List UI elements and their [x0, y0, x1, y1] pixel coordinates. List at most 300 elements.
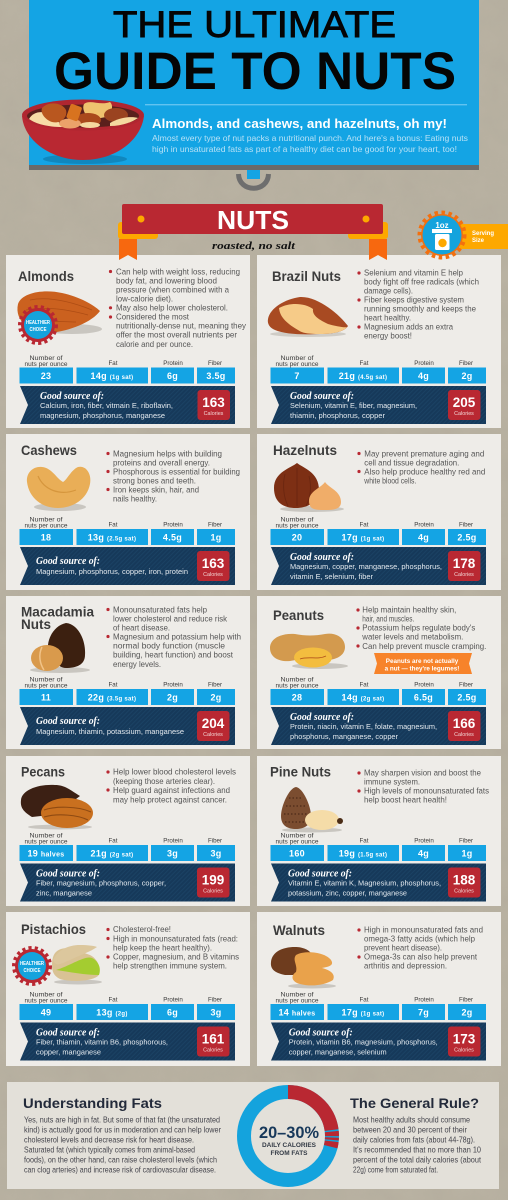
good source banner — [20, 864, 235, 902]
stats row: nuts per ounce — [24, 682, 68, 690]
good source banner: Protein, niacin, vitamin E, folate, magnesium, — [290, 722, 437, 731]
benefits list: of heart disease. — [113, 622, 170, 632]
stats row: nuts per ounce — [24, 522, 68, 530]
card: Peanuts — [257, 596, 501, 749]
benefits list: (keeping those arteries clear). — [113, 776, 215, 786]
stats row: nuts per ounce — [24, 361, 68, 368]
good source banner: Protein, vitamin B6, magnesium, phosphorus, — [289, 1038, 438, 1046]
good source banner: zinc, manganese — [36, 888, 92, 898]
good source banner: potassium, zinc, copper, manganese — [288, 888, 407, 898]
stats row — [20, 992, 235, 1020]
benefits list: offer the most overall nutrients per — [116, 330, 237, 340]
benefits list: Help maintain healthy skin, — [362, 605, 456, 615]
benefits list: immune system. — [364, 777, 420, 787]
benefits list: nails healthy. — [113, 493, 157, 503]
benefits list: body fat, and lowering blood — [116, 275, 217, 285]
stats row: Number of — [30, 832, 63, 840]
benefits list: heart healthy. — [364, 313, 411, 323]
stats row: Protein — [163, 996, 183, 1004]
icon: pecans — [21, 785, 93, 830]
heading: Cashews: Cashews — [21, 442, 77, 458]
benefits list — [357, 268, 479, 341]
heading: Pecans: Pecans — [21, 764, 65, 780]
stats row: Number of — [280, 832, 314, 840]
stats row: Protein — [163, 682, 183, 688]
stats row: Fiber — [459, 838, 473, 844]
stats row: 2g — [461, 371, 473, 381]
stats row: 6g — [167, 1008, 178, 1018]
benefits list: cell and tissue degradation. — [364, 457, 459, 467]
stats row: 22g (3.5g sat) — [88, 692, 136, 702]
good source banner: Calories — [203, 1048, 223, 1054]
text: general rule: Most healthy adults should consume — [353, 1115, 470, 1125]
good source banner: Good source of: — [288, 868, 352, 880]
intro text: Almost every type of nut packs a nutritional punch. And here's a bonus: Eating nuts — [152, 133, 468, 143]
stats row: Number of — [280, 516, 314, 524]
stats row — [20, 832, 235, 861]
title — [54, 4, 456, 101]
good source banner: Calories — [203, 732, 223, 738]
stats row: nuts per ounce — [276, 361, 319, 368]
card: Brazil Nuts — [257, 255, 501, 428]
good source banner: magnesium, phosphorus, manganese — [40, 411, 165, 420]
text: understanding fats: kind) is actually good for us in moderation and can help lower — [24, 1124, 221, 1134]
ribbon: NUTS heading — [118, 204, 388, 260]
benefits list: proteins and overall energy. — [113, 457, 210, 467]
good source banner — [271, 547, 486, 585]
benefits list: Help guard against infections and — [113, 785, 230, 795]
stats row — [270, 355, 486, 384]
icon: almond — [17, 291, 102, 334]
benefits list: May also help lower cholesterol. — [116, 302, 228, 312]
benefits list: nutritionally-dense nut, meaning they — [116, 321, 247, 331]
benefits list: help keep the heart healthy). — [113, 942, 212, 952]
good source banner: Magnesium, phosphorus, copper, iron, protein — [36, 567, 188, 576]
benefits list — [106, 924, 240, 971]
card: Pistachios — [6, 912, 250, 1066]
stats row: 3g — [167, 848, 178, 858]
stats row: 1g — [461, 848, 473, 858]
stats row: 3g — [210, 848, 222, 858]
stats row: Fat — [109, 996, 118, 1004]
stats row: 17g (1g sat) — [342, 1008, 384, 1018]
badge: 1oz serving size: Serving — [472, 231, 494, 237]
good source banner — [20, 707, 235, 745]
benefits list: lower cholesterol and reduce risk — [113, 613, 228, 623]
badge: 1oz serving size — [420, 212, 508, 258]
stats row — [270, 516, 486, 545]
stats row: 2.5g — [457, 532, 477, 542]
benefits list: omega-3 fatty acids (which help — [364, 934, 475, 944]
good source banner: Good source of: — [290, 551, 354, 563]
good source banner: 163 — [202, 395, 225, 410]
text: general rule: percent of the total daily calories (about — [353, 1154, 481, 1164]
heading: The General Rule?: The General Rule? — [350, 1095, 479, 1111]
stats row: Protein — [163, 360, 183, 367]
heading: Brazil Nuts: Brazil Nuts — [272, 268, 341, 284]
stats row: 19g (1.5g sat) — [339, 848, 387, 858]
callout: peanuts are legumes: a nut — they're legumes! — [385, 665, 459, 672]
good source banner: copper, manganese, selenium — [289, 1048, 387, 1056]
good source banner: copper, manganese — [36, 1048, 101, 1056]
good source banner: Good source of: — [36, 1026, 100, 1038]
stats row: Fat — [109, 522, 118, 528]
benefits list: strong bones and teeth. — [113, 475, 196, 485]
title: GUIDE TO NUTS — [54, 42, 456, 101]
heading: Macadamia Nuts: Macadamia — [21, 604, 94, 620]
good source banner: Fiber, thiamin, vitamin B6, phosphorous, — [36, 1038, 168, 1046]
text: general rule: between 20 and 30 percent of their — [353, 1124, 467, 1134]
benefits list: energy levels. — [113, 659, 161, 669]
stats row: Number of — [280, 676, 314, 684]
text: understanding fats: can clog arteries) and increase risk of cardiovascular disease. — [24, 1164, 216, 1174]
good source banner: phosphorus, manganese, copper — [290, 732, 398, 741]
panel: understanding fats and general rule — [7, 1082, 499, 1189]
stats row: nuts per ounce — [276, 522, 319, 530]
stats row: 2.5g — [457, 692, 477, 702]
stats row: Protein — [163, 838, 183, 844]
good source banner: Vitamin E, vitamin K, Magnesium, phosphorus, — [288, 878, 441, 888]
donut chart: daily calories from fats: DAILY CALORIES — [262, 1142, 317, 1149]
benefits list — [106, 767, 237, 804]
heading: Macadamia Nuts — [21, 604, 94, 632]
stats row: Number of — [30, 992, 63, 998]
heading: Pistachios: Pistachios — [21, 921, 86, 937]
benefits list: may help protect against cancer. — [113, 794, 227, 804]
benefits list: Magnesium adds an extra — [364, 322, 453, 332]
stats row: Fiber — [208, 522, 222, 528]
benefits list: prevent heart disease). — [364, 943, 442, 953]
good source banner: Good source of: — [40, 390, 104, 402]
good source banner: 161 — [202, 1032, 225, 1046]
text: general rule: It's recommended that no more than 10 — [353, 1144, 481, 1154]
good source banner: 205 — [453, 395, 476, 410]
benefits list: Iron keeps skin, hair, and — [113, 484, 199, 494]
stats row: 14g (2g sat) — [342, 692, 384, 702]
good source banner: Good source of: — [36, 555, 100, 567]
good source banner — [20, 386, 235, 424]
good source banner — [271, 1022, 486, 1060]
stats row: 23 — [41, 371, 51, 381]
stats row: Fat — [360, 838, 369, 844]
stats row: Fat — [360, 360, 369, 367]
stats row: 14 halves — [278, 1008, 316, 1018]
stats row: Fiber — [459, 682, 473, 688]
heading: Peanuts: Peanuts — [273, 607, 324, 623]
heading: Understanding Fats: Understanding Fats — [23, 1095, 162, 1111]
benefits list: damage cells). — [364, 286, 413, 296]
heading: Hazelnuts: Hazelnuts — [273, 442, 337, 458]
text: general rule: 22g) come from saturated fat. — [353, 1164, 438, 1174]
intro text — [152, 133, 468, 154]
heading: Walnuts: Walnuts — [273, 922, 325, 938]
heading: Almonds: Almonds — [18, 268, 74, 284]
stats row: Number of — [30, 676, 63, 684]
benefits list — [357, 924, 483, 971]
good source banner: Calories — [454, 572, 474, 578]
benefits list — [106, 604, 241, 669]
benefits list: white blood cells. — [364, 475, 416, 485]
good source banner: 173 — [453, 1032, 476, 1046]
intro text: high in unsaturated fats as part of a healthy diet can be good for your heart, too! — [152, 144, 457, 154]
stats row: Protein — [414, 838, 434, 844]
stats row: Protein — [414, 996, 434, 1004]
stats row: 21g (2g sat) — [91, 848, 133, 858]
badge: healthier choice — [14, 948, 50, 984]
card: Almonds — [6, 255, 250, 428]
stats row: Protein — [414, 682, 434, 688]
good source banner: Calories — [454, 888, 474, 894]
stats row: 6g — [167, 371, 178, 381]
donut chart: daily calories from fats: 20–30% — [259, 1123, 319, 1142]
good source banner: Good source of: — [290, 711, 354, 723]
donut chart: daily calories from fats: FROM FATS — [270, 1150, 308, 1157]
text: understanding fats: foods), on the other hand, can raise cholesterol levels (which — [24, 1154, 217, 1164]
stats row: Fiber — [208, 996, 222, 1004]
good source banner: 178 — [453, 556, 476, 571]
stats row: Number of — [280, 355, 314, 362]
icon: hanging handle — [238, 170, 268, 188]
benefits list: help strengthen immune system. — [113, 961, 227, 971]
text: general rule — [353, 1115, 481, 1174]
icon: bowl of nuts — [22, 100, 144, 164]
benefits list: Can help prevent muscle cramping. — [362, 641, 486, 651]
good source banner — [20, 1022, 235, 1060]
badge: healthier choice: CHOICE — [24, 968, 41, 974]
stats row — [20, 516, 235, 545]
icon: walnuts — [271, 947, 336, 988]
benefits list: Potassium helps regulate body's — [362, 623, 476, 633]
ribbon: NUTS heading: roasted, no salt — [212, 240, 296, 252]
good source banner: Calories — [454, 732, 474, 738]
good source banner — [271, 707, 486, 745]
text: understanding fats — [24, 1115, 221, 1174]
benefits list: low-calorie diet). — [116, 293, 173, 303]
benefits list: Can help with weight loss, reducing — [116, 266, 240, 276]
stats row: nuts per ounce — [24, 838, 68, 846]
good source banner: Good source of: — [289, 1026, 353, 1038]
stats row: 28 — [292, 692, 302, 702]
subtitle: Almonds, and cashews, and hazelnuts, oh my! — [152, 116, 447, 131]
heading: Pine Nuts: Pine Nuts — [270, 764, 331, 780]
badge: healthier choice: HEALTHIER — [26, 320, 50, 326]
good source banner: Good source of: — [36, 868, 100, 880]
benefits list: Fiber keeps digestive system — [364, 295, 464, 305]
good source banner: Magnesium, thiamin, potassium, manganese — [36, 727, 184, 736]
benefits list: High in monounsaturated fats (read: — [113, 933, 238, 943]
ribbon: NUTS heading: NUTS — [217, 205, 289, 235]
benefits list: arthritis and depression. — [364, 961, 447, 971]
stats row: 2g — [461, 1008, 473, 1018]
stats row: 18 — [41, 532, 51, 542]
good source banner: 188 — [453, 872, 476, 888]
stats row: 3g — [210, 1008, 222, 1018]
card: Macadamia Nuts — [6, 596, 250, 749]
benefits list: pressure (when combined with a — [116, 284, 229, 294]
stats row: Fat — [360, 682, 369, 688]
benefits list: help boost heart health! — [364, 795, 447, 805]
header panel — [29, 0, 479, 170]
stats row: Number of — [30, 355, 63, 362]
text: understanding fats: Saturated fat (which typically comes from animal-based — [24, 1144, 195, 1154]
good source banner: Calcium, iron, fiber, vitmain E, riboflavin, — [40, 401, 173, 410]
benefits list: High levels of monounsaturated fats — [364, 786, 490, 796]
stats row: Fat — [109, 682, 118, 688]
stats row: Fat — [109, 360, 118, 367]
card: Pecans — [6, 756, 250, 906]
stats row — [20, 355, 235, 384]
stats row: Number of — [280, 992, 314, 998]
stats row: Fiber — [208, 682, 222, 688]
benefits list: hair, and muscles. — [362, 614, 414, 624]
stats row: Fiber — [459, 522, 473, 528]
good source banner: Calories — [454, 411, 474, 417]
benefits list: running smoothly and keeps the — [364, 304, 476, 314]
benefits list: Considered the most — [116, 312, 190, 322]
donut chart: daily calories from fats — [244, 1092, 332, 1180]
stats row: 160 — [289, 848, 305, 858]
card: Cashews — [6, 434, 250, 590]
stats row: 4g — [418, 848, 429, 858]
text: general rule: daily calories from fats (about 44-78g). — [353, 1134, 475, 1144]
stats row — [20, 676, 235, 705]
benefits list: May sharpen vision and boost the — [364, 768, 481, 778]
benefits list: Also help produce healthy red and — [364, 466, 485, 476]
icon: pine nuts — [281, 787, 343, 832]
stats row: 4.5g — [163, 532, 182, 542]
benefits list: water levels and metabolism. — [361, 632, 463, 642]
benefits list: High in monounsaturated fats and — [364, 924, 483, 934]
benefits list — [106, 448, 240, 503]
good source banner: thiamin, phosphorus, copper — [290, 411, 385, 420]
heading: Macadamia Nuts: Nuts — [21, 616, 51, 632]
good source banner: Good source of: — [290, 390, 354, 402]
benefits list: Monounsaturated fats help — [113, 604, 207, 614]
stats row: nuts per ounce — [276, 998, 319, 1004]
stats row: 20 — [292, 532, 302, 542]
good source banner: 166 — [453, 716, 476, 731]
icon: macadamia nuts — [30, 623, 90, 673]
stats row: nuts per ounce — [24, 998, 68, 1004]
benefits list — [356, 605, 486, 651]
good source banner: Magnesium, copper, manganese, phosphorus, — [290, 562, 442, 571]
badge: 1oz serving size: Size — [472, 238, 485, 244]
good source banner: Calories — [204, 411, 224, 417]
stats row: Fat — [109, 838, 118, 844]
benefits list: Omega-3s can also help prevent — [364, 952, 478, 962]
good source banner: Fiber, magnesium, phosphorus, copper, — [36, 878, 166, 888]
benefits list: body fight off free radicals (which — [364, 277, 479, 287]
good source banner: Calories — [203, 888, 223, 894]
benefits list: building, heart function) and boost — [113, 649, 234, 659]
icon: cashew — [27, 467, 90, 511]
stats row: 7g — [418, 1008, 429, 1018]
benefits list: Magnesium helps with building — [113, 448, 222, 458]
stats row: Fiber — [459, 360, 473, 367]
stats row: 17g (1g sat) — [342, 532, 384, 542]
stats row: 2g — [167, 692, 178, 702]
stats row — [270, 832, 486, 861]
badge: healthier choice: HEALTHIER — [20, 961, 44, 967]
stats row: Fiber — [208, 360, 222, 367]
stats row: 1g — [210, 532, 222, 542]
good source banner — [20, 547, 235, 585]
stats row: Fat — [360, 522, 369, 528]
stats row: Protein — [163, 522, 183, 528]
good source banner — [271, 386, 486, 424]
stats row: 11 — [41, 692, 51, 702]
good source banner — [271, 864, 486, 902]
good source banner: Calories — [203, 572, 223, 578]
good source banner: Selenium, vitamin E, fiber, magnesium, — [290, 401, 417, 410]
stats row: Protein — [414, 360, 434, 367]
icon: pistachio — [52, 945, 102, 984]
benefits list: Help lower blood cholesterol levels — [113, 767, 237, 777]
text: understanding fats: Yes, nuts are high in fat. But some of that fat (the unsaturated — [24, 1115, 220, 1125]
badge: healthier choice: CHOICE — [30, 327, 47, 333]
stats row: 14g (1g sat) — [91, 371, 133, 381]
good source banner: Good source of: — [36, 715, 100, 727]
benefits list: energy boost! — [364, 331, 412, 341]
badge: healthier choice — [20, 307, 56, 343]
callout: peanuts are legumes — [374, 653, 472, 674]
benefits list: normal body function (muscle — [113, 640, 225, 650]
text: understanding fats: cholesterol levels and decrease risk for heart disease. — [24, 1134, 194, 1144]
benefits list: Selenium and vitamin E help — [364, 268, 463, 278]
stats row: 6.5g — [414, 692, 433, 702]
benefits list: May prevent premature aging and — [364, 448, 484, 458]
stats row: 13g (2g) — [96, 1008, 128, 1018]
benefits list: Copper, magnesium, and B vitamins — [113, 952, 240, 962]
good source banner: 163 — [202, 556, 225, 571]
stats row: 2g — [210, 692, 222, 702]
card: Walnuts — [257, 912, 501, 1066]
card: Hazelnuts — [257, 434, 501, 590]
stats row: nuts per ounce — [276, 838, 319, 846]
good source banner: 199 — [202, 872, 224, 888]
stats row: 49 — [41, 1008, 51, 1018]
good source banner: Calories — [454, 1048, 474, 1054]
good source banner: vitamin E, selenium, fiber — [290, 572, 373, 581]
benefits list: Cholesterol-free! — [113, 924, 171, 934]
benefits list: Magnesium and potassium help with — [113, 631, 241, 641]
benefits list — [357, 768, 490, 805]
icon: peanuts — [270, 634, 348, 669]
stats row: 3.5g — [206, 371, 226, 381]
good source banner: 204 — [202, 716, 225, 731]
benefits list: calorie and per ounce. — [116, 339, 193, 349]
benefits list — [357, 448, 485, 485]
benefits list — [109, 266, 247, 349]
stats row — [270, 992, 486, 1020]
stats row: Number of — [30, 516, 63, 524]
icon: hazelnuts — [274, 463, 344, 512]
stats row: 19 halves — [27, 848, 65, 858]
icon: brazil nut — [268, 297, 348, 337]
stats row: Fiber — [459, 996, 473, 1004]
callout: peanuts are legumes: Peanuts are not actually — [386, 658, 459, 665]
stats row: Protein — [414, 522, 434, 528]
stats row: 7 — [294, 371, 300, 381]
stats row — [270, 676, 486, 705]
stats row: nuts per ounce — [276, 682, 319, 690]
badge: 1oz serving size: 1oz — [435, 221, 449, 230]
stats row: 4g — [418, 532, 429, 542]
benefits list: Phosphorous is essential for building — [113, 466, 240, 476]
stats row: 4g — [418, 371, 429, 381]
stats row: 21g (4.5g sat) — [339, 371, 387, 381]
stats row: Fiber — [208, 838, 222, 844]
